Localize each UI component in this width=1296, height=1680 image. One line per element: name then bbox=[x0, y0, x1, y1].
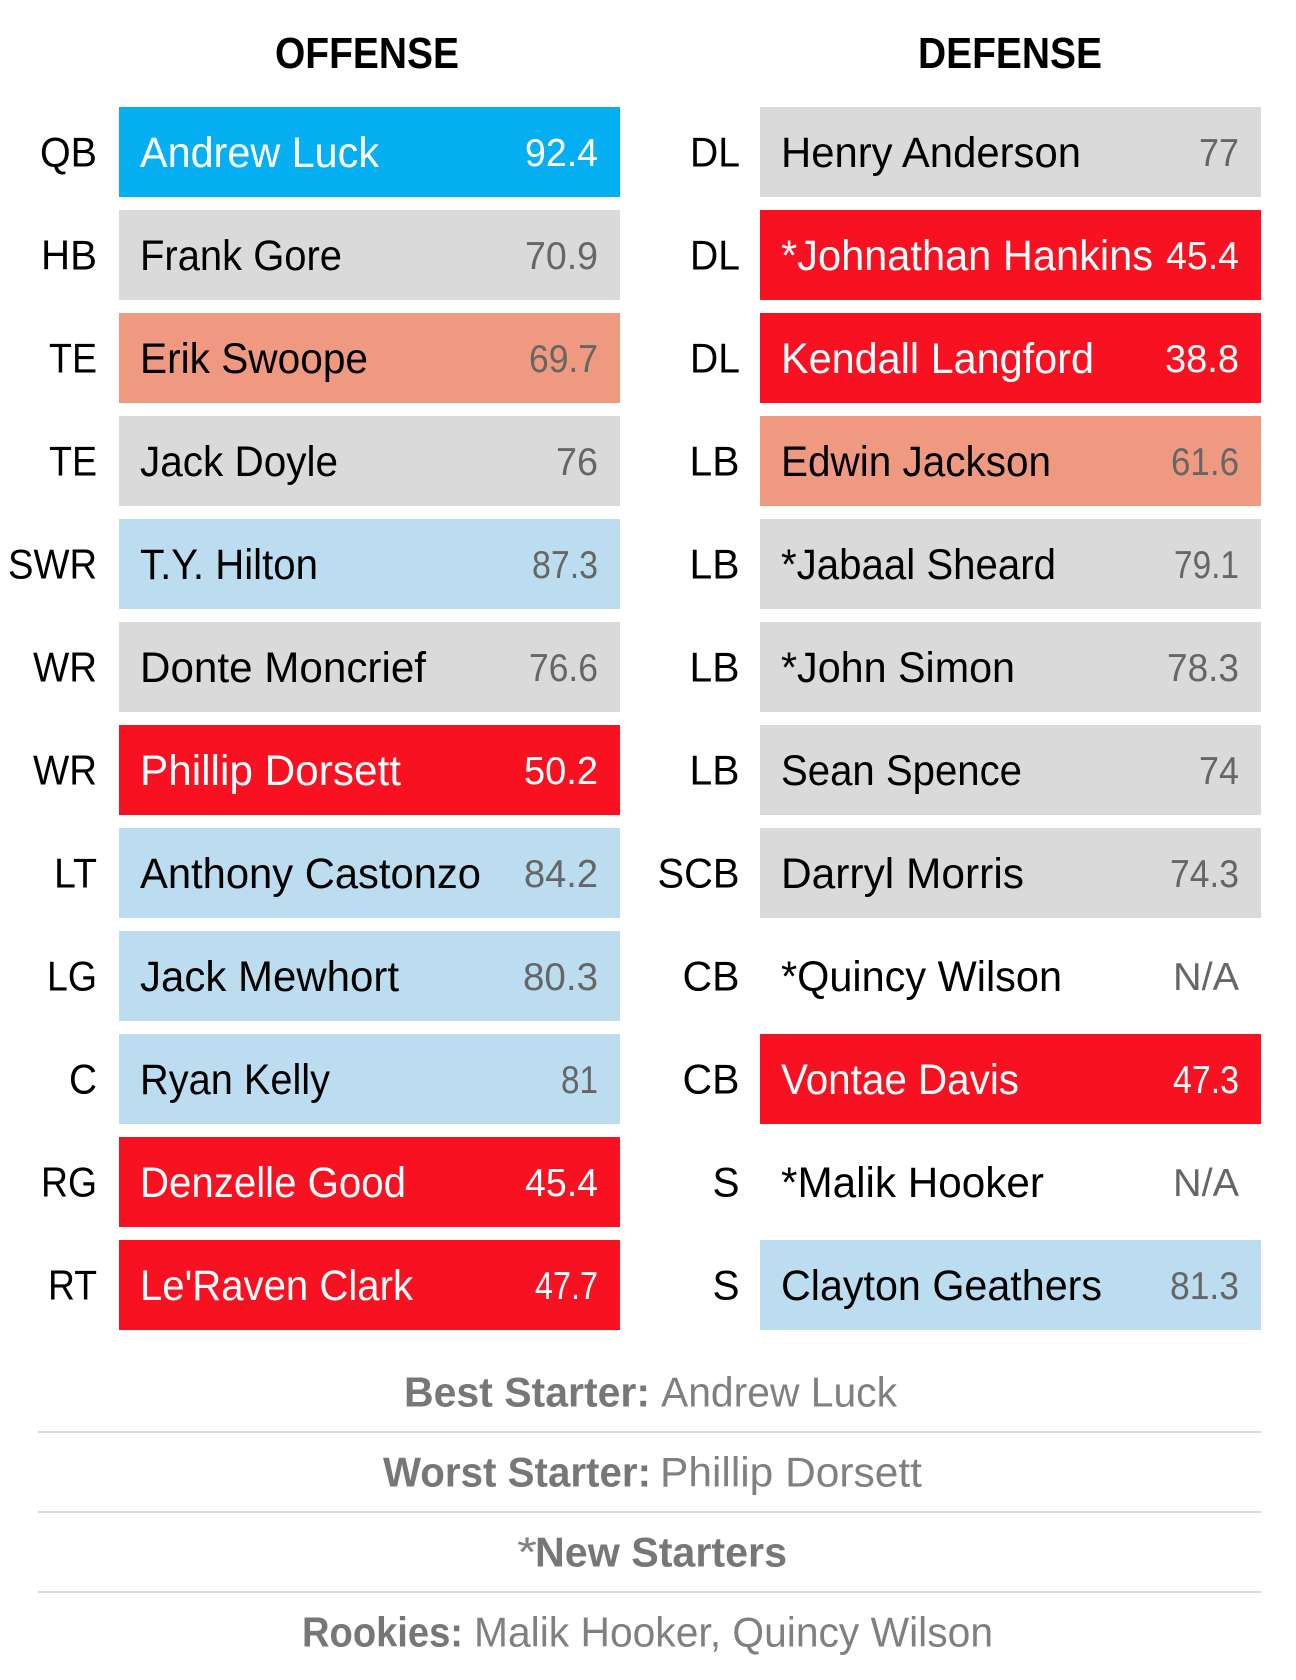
row: LB Jabaal Sheard: 79.1 bbox=[1174, 544, 1239, 587]
row: LB John Simon: *John Simon bbox=[781, 644, 1015, 692]
note: best starter: Andrew Luck bbox=[661, 1369, 898, 1416]
row: S Clayton Geathers: Clayton Geathers bbox=[781, 1262, 1102, 1310]
row: SWR T.Y. Hilton: T.Y. Hilton bbox=[140, 541, 318, 589]
row: SCB Darryl Morris: 74.3 bbox=[1170, 853, 1239, 896]
row: LB John Simon: LB bbox=[690, 644, 740, 690]
row: LT Anthony Castonzo: 84.2 bbox=[524, 853, 598, 896]
row: LB Sean Spence: Sean Spence bbox=[781, 747, 1022, 795]
row: RT Le'Raven Clark: Le'Raven Clark bbox=[140, 1262, 413, 1310]
row: S Malik Hooker bbox=[712, 1158, 1239, 1207]
row: SWR T.Y. Hilton: SWR bbox=[8, 540, 97, 588]
row: RG Denzelle Good: Denzelle Good bbox=[140, 1159, 406, 1207]
row: DL Johnathan Hankins: *Johnathan Hankins bbox=[781, 232, 1153, 280]
row: LT Anthony Castonzo bbox=[54, 828, 620, 918]
row: DL Henry Anderson: Henry Anderson bbox=[781, 129, 1081, 177]
row: S Malik Hooker: N/A bbox=[1173, 1162, 1239, 1205]
row: SWR T.Y. Hilton: 87.3 bbox=[532, 544, 598, 587]
row: SCB Darryl Morris: SCB bbox=[658, 850, 740, 896]
row: DL Kendall Langford bbox=[690, 313, 1261, 403]
row: QB Andrew Luck bbox=[40, 107, 620, 197]
row: HB Frank Gore: HB bbox=[41, 232, 97, 278]
row: WR Donte Moncrief: WR bbox=[33, 644, 97, 690]
row: DL Henry Anderson: DL bbox=[690, 128, 740, 176]
row: S Malik Hooker: *Malik Hooker bbox=[781, 1159, 1044, 1207]
row: LT Anthony Castonzo: Anthony Castonzo bbox=[140, 850, 481, 898]
row: CB Vontae Davis: CB bbox=[682, 1056, 740, 1102]
note: new starters: New Starters bbox=[535, 1529, 787, 1576]
row: QB Andrew Luck: 92.4 bbox=[525, 132, 598, 175]
row: S Clayton Geathers: S bbox=[712, 1262, 740, 1308]
note: worst starter: Phillip Dorsett bbox=[660, 1449, 922, 1496]
row: C Ryan Kelly: 81 bbox=[561, 1059, 598, 1102]
row: WR Donte Moncrief: Donte Moncrief bbox=[140, 644, 427, 692]
row: LB Jabaal Sheard: LB bbox=[690, 540, 740, 588]
row: HB Frank Gore bbox=[41, 210, 620, 300]
row: DL Kendall Langford: Kendall Langford bbox=[781, 335, 1094, 383]
note: worst starter: Worst Starter: bbox=[383, 1449, 651, 1496]
panel: defense bbox=[658, 29, 1261, 1330]
row: C Ryan Kelly bbox=[69, 1034, 620, 1124]
row: DL Johnathan Hankins: 45.4 bbox=[1166, 235, 1239, 278]
row: LG Jack Mewhort: 80.3 bbox=[523, 956, 598, 999]
row: DL Kendall Langford: 38.8 bbox=[1165, 338, 1239, 381]
row: S Malik Hooker: S bbox=[712, 1158, 740, 1206]
row: RG Denzelle Good bbox=[41, 1137, 620, 1227]
note: best starter bbox=[404, 1369, 898, 1416]
row: WR Phillip Dorsett: Phillip Dorsett bbox=[140, 747, 401, 795]
row: TE Jack Doyle: TE bbox=[49, 438, 97, 484]
row: WR Phillip Dorsett: 50.2 bbox=[524, 750, 598, 793]
row: WR Phillip Dorsett: WR bbox=[33, 746, 97, 794]
row: CB Vontae Davis: Vontae Davis bbox=[781, 1056, 1019, 1104]
row: SCB Darryl Morris bbox=[658, 828, 1261, 918]
row: LG Jack Mewhort: LG bbox=[47, 952, 97, 1000]
row: TE Erik Swoope: TE bbox=[49, 334, 97, 382]
row: TE Erik Swoope: 69.7 bbox=[529, 338, 598, 381]
note: best starter: Best Starter: bbox=[404, 1369, 650, 1416]
row: LB Edwin Jackson bbox=[690, 416, 1261, 506]
note: new starters: * bbox=[517, 1529, 537, 1576]
row: CB Quincy Wilson: CB bbox=[682, 952, 740, 1000]
row: LG Jack Mewhort: Jack Mewhort bbox=[140, 953, 399, 1001]
row: C Ryan Kelly: Ryan Kelly bbox=[140, 1056, 330, 1104]
row: TE Erik Swoope bbox=[49, 313, 620, 403]
row: LB Edwin Jackson: Edwin Jackson bbox=[781, 438, 1051, 486]
row: WR Donte Moncrief: 76.6 bbox=[529, 647, 598, 690]
row: CB Vontae Davis bbox=[682, 1034, 1261, 1124]
row: LB Edwin Jackson: LB bbox=[690, 438, 740, 484]
heading: defense: DEFENSE bbox=[918, 29, 1102, 78]
row: RT Le'Raven Clark: 47.7 bbox=[535, 1265, 598, 1308]
row: LB Jabaal Sheard bbox=[690, 519, 1261, 609]
row: LB John Simon: 78.3 bbox=[1167, 647, 1239, 690]
row: HB Frank Gore: 70.9 bbox=[525, 235, 598, 278]
panel: offense bbox=[8, 29, 620, 1330]
note: worst starter bbox=[383, 1449, 922, 1496]
row: LB Edwin Jackson: 61.6 bbox=[1171, 441, 1239, 484]
row: WR Donte Moncrief bbox=[33, 622, 620, 712]
row: SCB Darryl Morris: Darryl Morris bbox=[781, 850, 1024, 898]
row: TE Erik Swoope: Erik Swoope bbox=[140, 335, 368, 383]
row: DL Johnathan Hankins bbox=[690, 210, 1261, 300]
row: S Clayton Geathers bbox=[712, 1240, 1261, 1330]
row: RT Le'Raven Clark bbox=[48, 1240, 620, 1330]
row: TE Jack Doyle: Jack Doyle bbox=[140, 438, 338, 486]
row: QB Andrew Luck: QB bbox=[40, 128, 97, 176]
row: DL Henry Anderson bbox=[690, 107, 1261, 197]
row: SWR T.Y. Hilton bbox=[8, 519, 620, 609]
heading: offense: OFFENSE bbox=[275, 29, 459, 78]
row: QB Andrew Luck: Andrew Luck bbox=[140, 129, 379, 177]
row: CB Quincy Wilson bbox=[682, 952, 1239, 1001]
row: DL Henry Anderson: 77 bbox=[1199, 132, 1239, 175]
row: DL Kendall Langford: DL bbox=[690, 334, 740, 382]
panel: notes bbox=[38, 1369, 1261, 1656]
note: rookies: Rookies: bbox=[302, 1609, 463, 1656]
row: CB Vontae Davis: 47.3 bbox=[1173, 1059, 1239, 1102]
row: RG Denzelle Good: 45.4 bbox=[525, 1162, 598, 1205]
row: LB Sean Spence: LB bbox=[690, 746, 740, 794]
row: LT Anthony Castonzo: LT bbox=[54, 850, 97, 896]
row: TE Jack Doyle bbox=[49, 416, 620, 506]
row: CB Quincy Wilson: N/A bbox=[1173, 956, 1239, 999]
row: WR Phillip Dorsett bbox=[33, 725, 620, 815]
row: TE Jack Doyle: 76 bbox=[556, 441, 598, 484]
row: S Clayton Geathers: 81.3 bbox=[1170, 1265, 1239, 1308]
row: DL Johnathan Hankins: DL bbox=[690, 232, 740, 278]
row: LB Sean Spence bbox=[690, 725, 1261, 815]
row: LB John Simon bbox=[690, 622, 1261, 712]
row: C Ryan Kelly: C bbox=[69, 1056, 97, 1102]
row: RT Le'Raven Clark: RT bbox=[48, 1262, 97, 1308]
note: rookies: Malik Hooker, Quincy Wilson bbox=[474, 1609, 993, 1656]
row: HB Frank Gore: Frank Gore bbox=[140, 232, 342, 280]
row: LB Sean Spence: 74 bbox=[1199, 750, 1239, 793]
row: CB Quincy Wilson: *Quincy Wilson bbox=[781, 953, 1062, 1001]
row: LB Jabaal Sheard: *Jabaal Sheard bbox=[781, 541, 1056, 589]
row: LG Jack Mewhort bbox=[47, 931, 620, 1021]
row: RG Denzelle Good: RG bbox=[41, 1158, 97, 1206]
